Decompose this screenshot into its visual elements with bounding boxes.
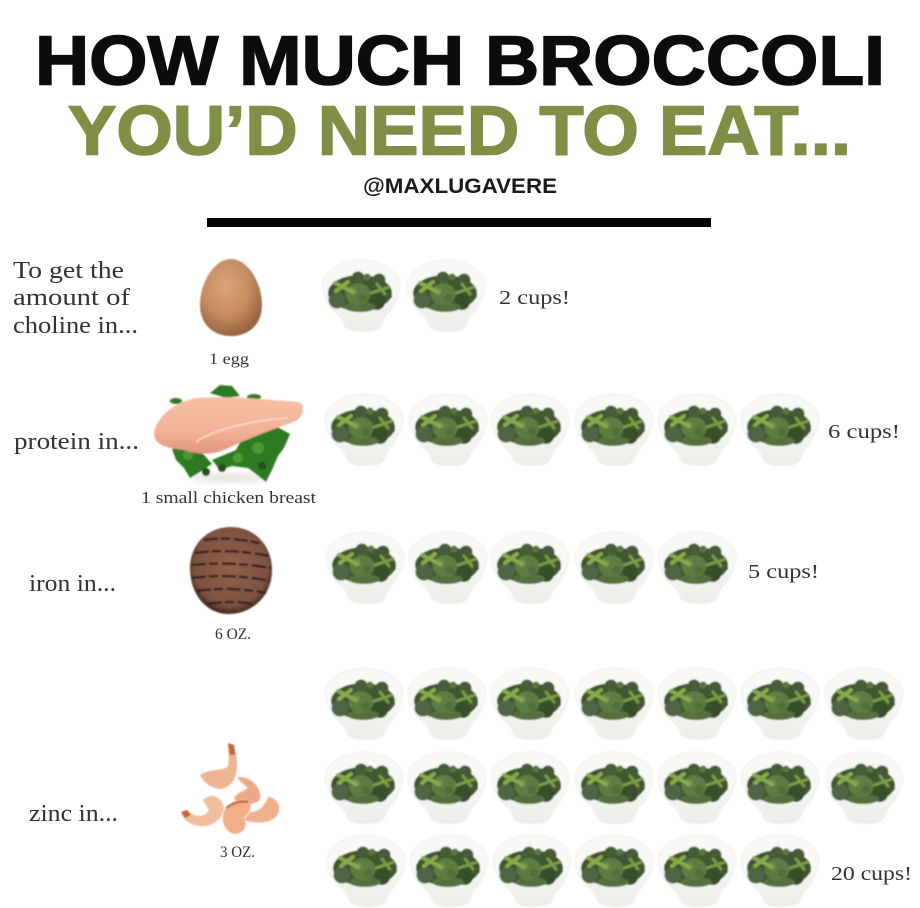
bowls: 6 cups <box>325 394 819 466</box>
caption: 1 small chicken breast: 1 small chicken breast <box>141 488 316 507</box>
title: line two: YOU’D NEED TO EAT... <box>68 92 851 170</box>
icon: chicken breast <box>154 385 303 483</box>
icon: beef patty <box>190 527 272 614</box>
label: choline: amount of <box>13 285 130 311</box>
icon: shrimp <box>181 743 279 834</box>
result: 2 cups: 2 cups! <box>499 287 570 309</box>
label: iron: iron in... <box>29 571 116 597</box>
caption: 1 egg: 1 egg <box>209 351 249 368</box>
caption: 6 oz.: 6 OZ. <box>215 626 251 643</box>
label: zinc: zinc in... <box>29 801 118 827</box>
divider bar <box>207 218 711 227</box>
bowls: 2 cups <box>322 260 485 332</box>
row: protein <box>14 385 900 507</box>
label: protein: protein in... <box>14 429 139 455</box>
bowls: 20 cups <box>325 668 903 907</box>
row: iron <box>29 527 819 643</box>
row: zinc <box>29 668 912 907</box>
caption: 3 oz.: 3 OZ. <box>220 844 255 861</box>
icon: egg <box>200 259 262 336</box>
result: 5 cups: 5 cups! <box>748 561 819 583</box>
title: line one: HOW MUCH BROCCOLI <box>35 22 885 100</box>
bowls: 5 cups <box>326 532 736 604</box>
author handle: @MAXLUGAVERE <box>363 175 557 198</box>
result: 6 cups: 6 cups! <box>828 421 900 443</box>
result: 20 cups: 20 cups! <box>831 863 912 885</box>
label: choline <box>13 258 138 339</box>
row: choline <box>13 258 570 368</box>
label: choline: To get the <box>13 258 124 284</box>
label: choline: choline in... <box>13 313 138 339</box>
